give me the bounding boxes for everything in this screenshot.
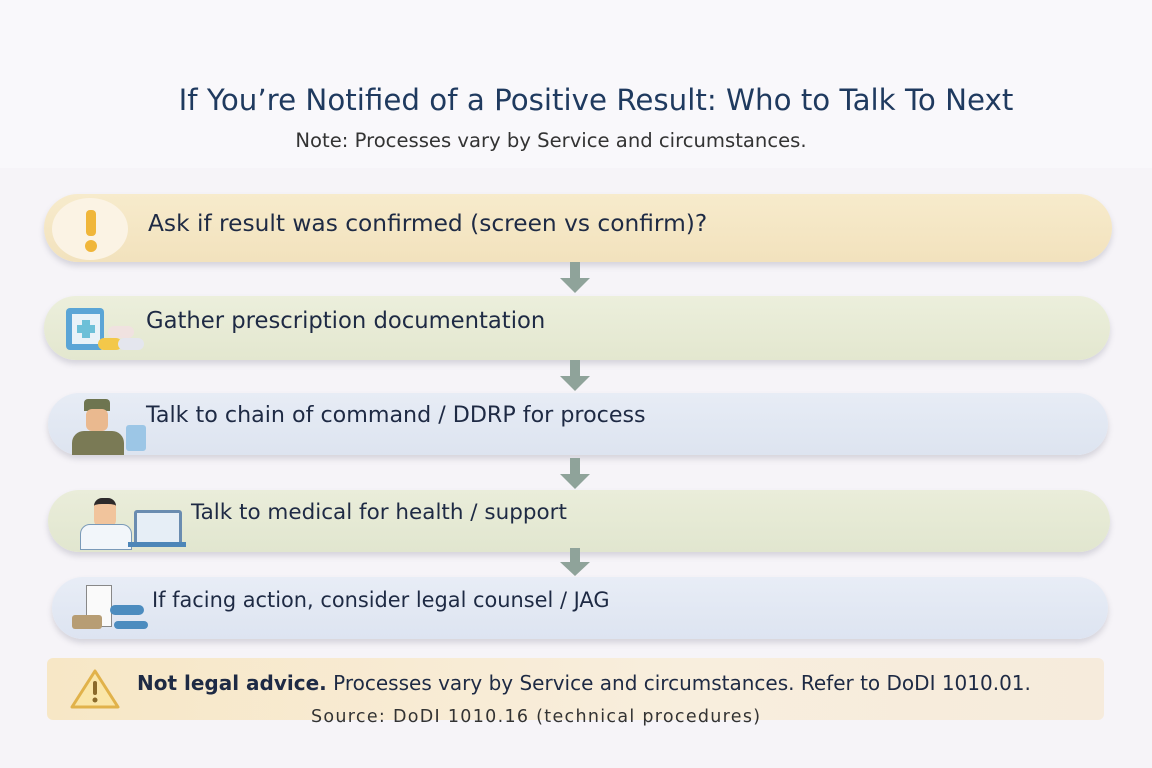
arrow: [560, 458, 590, 489]
arrow: [560, 548, 590, 576]
arrow: [560, 360, 590, 391]
step 3: chain of command: [48, 393, 1108, 455]
title: If You’re Notified of a Positive Result: Who to Talk To Next: [179, 83, 1013, 117]
source: Source: DoDI 1010.16 (technical procedures): [311, 707, 761, 727]
icon: warning triangle: [70, 669, 120, 708]
text: Talk to chain of command / DDRP for process: [146, 402, 646, 428]
text: Ask if result was confirmed (screen vs confirm)?: [148, 210, 707, 237]
arrow: [560, 262, 590, 293]
step 2: prescription: [44, 296, 1110, 360]
icon: document and gavel: [72, 585, 148, 629]
step 4: medical: [48, 490, 1110, 552]
icon: medical binder and pills: [66, 308, 144, 350]
text: Talk to medical for health / support: [191, 500, 567, 525]
note: Note: Processes vary by Service and circumstances.: [295, 129, 807, 152]
text: Not legal advice. Processes vary by Service and circumstances. Refer to DoDI 1010.01.: [137, 671, 1031, 695]
text: Gather prescription documentation: [146, 308, 545, 334]
text: If facing action, consider legal counsel / JAG: [152, 588, 610, 612]
icon: exclamation: [52, 198, 128, 260]
step 1: ask if confirmed: [44, 194, 1112, 262]
disclaimer box: [47, 658, 1104, 720]
icon: soldier: [72, 399, 146, 455]
icon: doctor with laptop: [80, 498, 186, 550]
step 5: legal counsel: [52, 577, 1108, 639]
